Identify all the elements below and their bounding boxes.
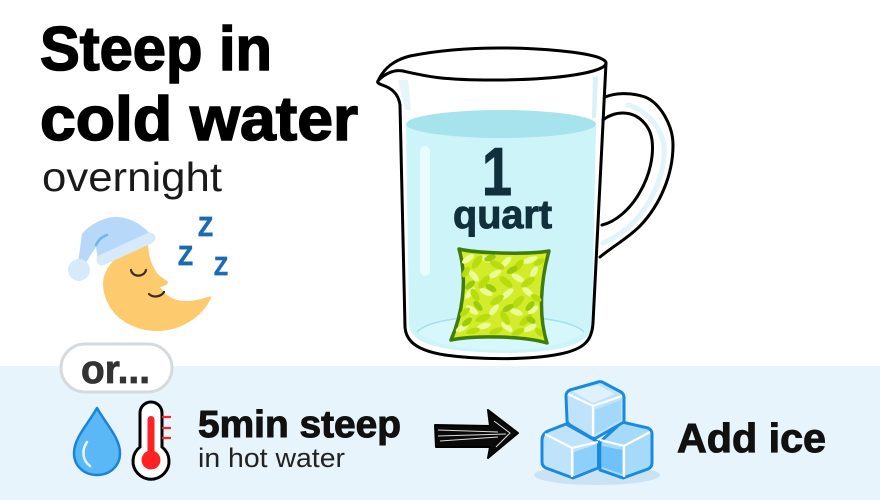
callout: or... xyxy=(61,344,172,392)
icon: Z letters xyxy=(178,211,228,281)
icon: sleeping moon xyxy=(68,217,211,331)
title xyxy=(40,15,358,154)
icon: thermometer xyxy=(133,402,171,479)
title: Steep in xyxy=(40,15,272,84)
pitcher of water xyxy=(378,48,673,359)
text: 5min steep: 5min steep xyxy=(198,404,401,446)
label: 1 quart: 1 xyxy=(482,134,512,210)
cube: top xyxy=(566,382,624,438)
subtitle: overnight: overnight xyxy=(42,154,223,200)
text: Add ice: Add ice xyxy=(677,415,826,461)
rim xyxy=(378,48,606,81)
bottom ring xyxy=(417,316,584,350)
handle xyxy=(600,94,673,257)
cube: right xyxy=(600,422,652,478)
icon: Z letters: Z xyxy=(198,211,213,242)
icon: Z letters: Z xyxy=(178,240,193,271)
callout: or...: or... xyxy=(81,348,150,392)
icon: ice cubes xyxy=(534,382,660,485)
arrow xyxy=(435,410,518,458)
bottom band xyxy=(0,366,880,500)
label: 1 quart: quart xyxy=(453,193,552,237)
text: 5min steep: in hot water xyxy=(198,443,345,473)
icon: Z letters: Z xyxy=(214,251,228,281)
glass highlights xyxy=(420,146,430,276)
outline xyxy=(378,63,606,359)
cube: left xyxy=(542,424,598,478)
label: 1 quart xyxy=(453,134,552,237)
water surface xyxy=(406,110,596,138)
icon: water drop xyxy=(74,408,120,475)
text: 5min steep xyxy=(198,404,401,473)
tea bag xyxy=(451,249,549,343)
water body xyxy=(406,124,596,353)
title: cold water xyxy=(40,85,358,154)
